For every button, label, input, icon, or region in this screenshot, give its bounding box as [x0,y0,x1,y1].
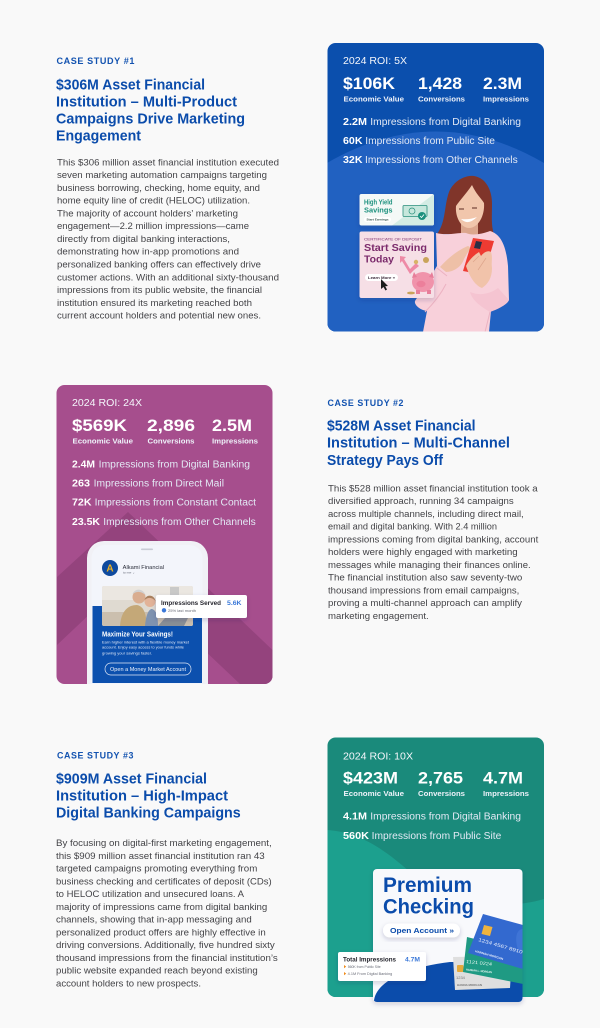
bank logo: A [106,564,114,574]
heading: case study 1 [56,76,245,144]
body text: case study 1: directly from digital banking interactions, [57,234,230,245]
stat: impressions [483,772,529,798]
impressions breakdown list: Impressions from Other Channels [103,517,256,528]
impressions breakdown list: 23.5K [72,517,101,528]
credit card: grey: 1234 [456,975,466,980]
body text: case study 2: This $528 million asset financial institution took a [328,483,538,494]
promo copy: Earn higher interest with a flexible money market [102,640,189,644]
impressions breakdown list: Impressions from Digital Banking [370,812,521,823]
body text: case study 2: messages while managing their finances online. [328,560,531,571]
impressions breakdown list: 60K [343,136,363,147]
body text: case study 2: thousand impressions from email campaigns, [328,586,519,596]
stat: economic value: $423M [343,768,398,787]
photo: smiling couple [102,586,193,626]
heading: case study 1: Campaigns Drive Marketing [56,110,245,127]
blue hump [374,962,523,1002]
body text: case study 1: seven marketing automation campaigns targeting [57,170,267,181]
stat: economic value: $106K [343,74,396,93]
body text: case study 2: across multiple channels, including direct mail, [328,509,524,520]
section: case study 2 text [327,398,539,622]
body text: case study 1: home equity line of credit (HELOC) utilization. [57,196,250,207]
body text: case study 2: impressions coming from digital banking, account [328,534,539,545]
body text: case study 3: thousand impressions from the financial institution’s [56,953,278,964]
icon: piggy bank [407,272,434,294]
eyebrow: case study 1: CASE STUDY #1 [56,56,135,66]
body text: case study 1: current account holders and potential new ones. [57,311,261,322]
body text: case study 1 [57,157,279,322]
body text: case study 1: customer actions. With an additional sixty-thousand [57,272,279,283]
stat: conversions: 2,896 [147,416,195,435]
impressions breakdown list: Impressions from Public Site [372,831,502,842]
heading: case study 3: Digital Banking Campaigns [56,805,241,822]
body text: case study 3: majority of impressions came from digital banking [56,902,267,913]
heading: case study 2 [327,418,510,469]
impressions breakdown list [343,117,521,166]
stat: economic value [72,418,133,444]
panel: case study 2 purple stats [56,385,272,711]
impressions breakdown list: 2.4M [72,459,95,470]
body text: case study 1: This $306 million asset financial institution executed [57,157,279,168]
body text: case study 3 [56,838,278,989]
ad card: high yield savings [360,194,434,226]
ad card: certificate of deposit: Today [364,254,394,265]
heading: case study 3: $909M Asset Financial [56,771,207,788]
body text: case study 2 [328,483,539,622]
icon: red smartphone [463,238,494,275]
promo copy: account. Enjoy easy access to your funds while [102,646,184,650]
impressions breakdown list: 263 [72,478,90,490]
body text: case study 2: proving a multi-channel approach can amplify [328,598,522,609]
impressions breakdown list: Impressions from Digital Banking [99,459,250,470]
section: case study 1 text [56,56,279,322]
heading: case study 2: Strategy Pays Off [327,452,444,469]
impressions breakdown list: Impressions from Public Site [365,136,495,147]
stat: conversions [418,78,465,102]
credit card: grey: HANNA MORGAN [457,983,482,987]
body text: case study 3: targeted campaigns promoting everything from [56,864,257,875]
body text: case study 1: institution ensured its marketing reached both [57,298,252,309]
ad card: high yield savings: Savings [364,206,392,215]
bank name: Alkami Financial [123,565,164,571]
heading: case study 2: Institution – Multi-Channel [327,435,510,452]
heading: case study 1: $306M Asset Financial [56,76,205,93]
impressions breakdown list [343,812,521,842]
heading: case study 3: Institution – High-Impact [56,788,228,805]
stat: impressions [484,78,529,103]
credit card: blue: HANNAH MORGAN [475,949,504,961]
impressions breakdown list [72,459,256,528]
body text: case study 3: public website expanded reach beyond existing [56,966,258,977]
stat: conversions: Conversions [418,789,465,798]
ad card: certificate of deposit: CERTIFICATE OF DEPOSIT [364,237,422,241]
stat: economic value [343,771,404,796]
body text: case study 1: impressions from its public website, the financial [57,285,262,296]
stat: conversions: Conversions [418,95,465,104]
ad card: certificate of deposit: Start Saving [364,243,427,254]
ROI label 10X: 2024 ROI: 10X [343,751,413,762]
ad card: certificate of deposit: Learn More » [368,276,395,280]
ROI label 24X: 2024 ROI: 24X [72,398,142,409]
stat: impressions: 2.3M [483,74,522,93]
stat: impressions: 4.7M [483,768,523,787]
body text: case study 2: diversified approach, running 34 campaigns [328,496,514,507]
body text: case study 2: The financial institution also saw seventy-two [328,573,522,584]
icon: cursor [381,279,388,290]
stat: conversions: 1,428 [418,74,462,93]
credit card: blue [468,914,522,969]
impressions breakdown list: 560K [343,831,370,842]
stat: conversions [148,420,194,444]
ad headline: Premium [383,874,472,897]
stat: impressions: Impressions [483,95,529,104]
credit card: green [463,937,526,984]
stat card: total impressions [338,952,426,981]
eyebrow: case study 2: CASE STUDY #2 [328,398,404,408]
stat: economic value [343,76,404,102]
icon: banknote with check [403,206,427,220]
impressions breakdown list: 32K [343,155,363,166]
promo headline: Maximize Your Savings! [102,632,173,638]
stat: conversions: 2,765 [418,768,463,787]
icon: rising arrow [400,256,419,274]
impressions breakdown list: 2.2M [343,117,367,128]
bank logo [102,560,118,576]
body text: case study 1: The majority of account holders’ marketing [57,208,238,219]
heading: case study 3 [56,771,241,822]
stat card: impressions served: 5.6K [227,600,242,607]
body text: case study 1: demonstrating how in-app promotions and [57,247,239,258]
stat card: total impressions: 560K from Public Site [348,965,381,969]
body text: case study 1: engagement—2.2 million impressions—came [57,221,249,232]
promo button [105,663,191,675]
bank name: to me ⌄ [123,570,135,574]
panel: case study 3 teal stats [327,738,544,1002]
body text: case study 3: account holders to new prospects. [56,978,201,989]
stat card: total impressions: 4.7M [405,958,420,964]
ad card: high yield savings: Start Earnings [366,218,389,222]
body text: case study 3: driving conversions. Additionally, five hundred sixty [56,940,275,951]
stat: impressions: Impressions [483,789,529,798]
stat: economic value: Economic Value [72,437,133,446]
promo copy: growing your savings faster. [102,651,152,655]
promo copy [102,640,189,655]
bank name [122,565,164,574]
stat: economic value: Economic Value [344,95,404,104]
body text: case study 3: to HELOC utilization and unsecured loans. A [56,889,245,900]
icon: coin [423,257,429,263]
stat card: impressions served [156,595,247,618]
ad card: premium checking [373,869,530,1002]
credit card: grey [453,956,512,990]
illustration: woman with phone [415,176,509,332]
body text: case study 3: channels, showing that in-app messaging and [56,915,252,926]
phone mockup [87,541,208,684]
body text: case study 3: personalized product offers are highly effective in [56,927,266,938]
ROI label 5X: 2024 ROI: 5X [343,56,407,67]
body text: case study 2: email and digital banking. With 2.4 million [328,522,497,533]
ad card: high yield savings: High Yield [364,197,392,206]
open account button [383,924,460,938]
body text: case study 3: By focusing on digital-first marketing engagement, [56,838,272,849]
body text: case study 1: business borrowing, checking, home equity, and [57,183,260,194]
stat: impressions [212,420,258,445]
stat card: total impressions: Total Impressions [343,958,397,964]
stat: economic value: $569K [72,416,128,435]
body text: case study 1: personalized banking offers can effectively drive [57,260,261,270]
ad headline: Checking [383,896,474,918]
open account button: Open Account » [390,926,454,935]
impressions breakdown list: 72K [72,498,92,509]
impressions breakdown list: Impressions from Constant Contact [95,498,256,509]
stat card: total impressions: 4.1M From Digital Banking [348,972,392,976]
promo button: Open a Money Market Account [110,667,186,673]
panel: case study 1 blue stats [327,43,544,332]
stat: economic value: Economic Value [344,789,404,798]
body text: case study 2: holders were highly engaged with marketing [328,547,518,558]
stat: conversions: Conversions [148,437,194,446]
section: case study 3 text [56,751,278,989]
heading: case study 1: Engagement [56,127,141,144]
ad card: certificate of deposit [360,232,434,298]
body text: case study 2: marketing engagement. [328,611,429,622]
impressions breakdown list: Impressions from Digital Banking [370,117,521,128]
credit card: green: HANNAH L. MORGAN [466,968,492,974]
body text: case study 3: this $909 million asset financial institution ran 43 [56,851,265,862]
impressions breakdown list: Impressions from Other Channels [365,155,518,166]
stat: impressions: Impressions [212,437,258,446]
heading: case study 2: $528M Asset Financial [327,418,476,435]
stat: conversions [418,772,465,796]
heading: case study 1: Institution – Multi-Product [56,93,237,110]
credit card: blue: 1234 4567 8910 [477,937,524,956]
body text: case study 3: business checking and certificates of deposit (CDs) [56,876,272,887]
impressions breakdown list: Impressions from Direct Mail [94,478,224,490]
eyebrow: case study 3: CASE STUDY #3 [57,751,134,761]
stat: impressions: 2.5M [212,416,252,435]
ad headline [383,874,474,918]
credit card: green: 1121 0224 [466,959,493,967]
stat card: impressions served: Impressions Served [161,600,221,607]
impressions breakdown list: 4.1M [343,812,367,823]
stat card: impressions served: 25% last month [168,609,196,613]
